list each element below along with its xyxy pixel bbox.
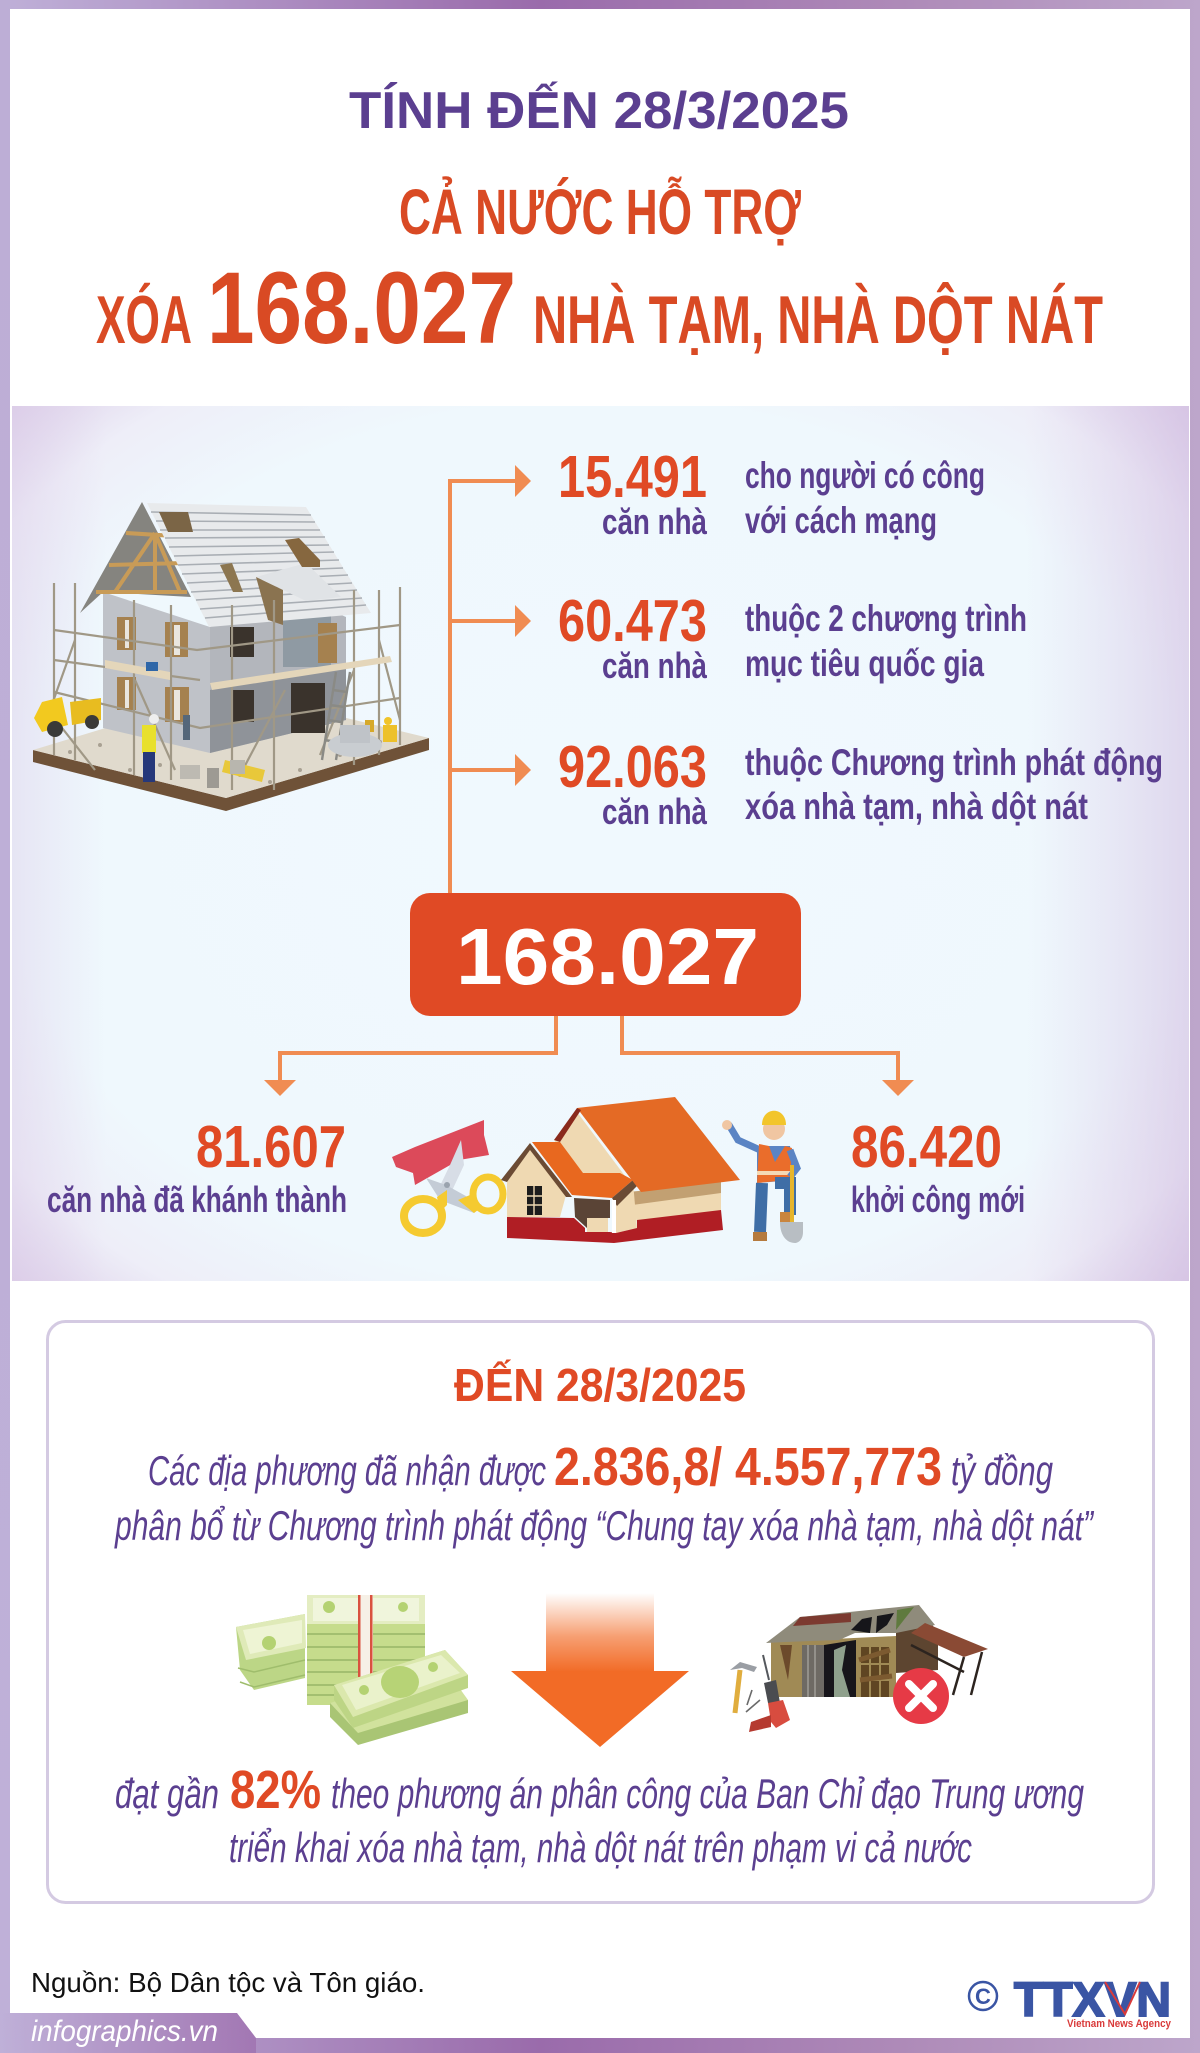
card text: result: đạt gần xyxy=(115,1770,219,1817)
outcome: inaugurated xyxy=(47,1114,347,1220)
arrow: second item xyxy=(515,605,531,637)
connector: split to two outcomes xyxy=(264,1016,914,1096)
card text: result: 82% xyxy=(230,1760,321,1820)
item: 15.491 xyxy=(558,444,985,542)
title: line three: XÓA xyxy=(96,282,192,358)
card text: received funds: 2.836,8/ 4.557,773 xyxy=(554,1437,942,1497)
title block xyxy=(96,81,1103,365)
scaffolding xyxy=(48,583,400,790)
card heading: ĐẾN 28/3/2025 xyxy=(454,1359,746,1411)
icon: finished house xyxy=(501,1097,740,1243)
item: 92.063: 92.063 xyxy=(558,734,707,800)
item: 60.473: 60.473 xyxy=(558,588,707,654)
arrow: first item xyxy=(515,465,531,497)
item: 92.063 xyxy=(558,734,1163,832)
outcome: inaugurated: 81.607 xyxy=(196,1114,346,1180)
total box: 168.027 xyxy=(456,912,759,1001)
item: 60.473: căn nhà xyxy=(602,645,708,686)
walls xyxy=(103,592,210,753)
footer tab: infographics.vn: infographics.vn xyxy=(31,2015,218,2048)
connector: vertical trunk with three arrows xyxy=(450,465,531,893)
logo: TTXVN: Vietnam News Agency xyxy=(1067,2018,1172,2030)
skylights xyxy=(159,512,193,532)
gable and truss xyxy=(80,502,191,613)
logo: TTXVN: TTXVN xyxy=(1014,1974,1171,2027)
item: 15.491: với cách mạng xyxy=(745,500,937,541)
outcome: newly started: 86.420 xyxy=(851,1114,1002,1180)
item: 15.491: 15.491 xyxy=(558,444,707,510)
card text: received funds: Các địa phương đã nhận được xyxy=(148,1447,546,1494)
icon: worker with shovel xyxy=(722,1111,803,1243)
roof xyxy=(147,503,371,627)
materials xyxy=(222,760,265,782)
outcome: newly started: khởi công mới xyxy=(851,1179,1025,1220)
illustration: house under construction xyxy=(33,502,429,811)
total box xyxy=(410,893,801,1016)
yellow truck xyxy=(34,697,68,732)
arrow: large down arrow xyxy=(511,1593,689,1747)
logo: TTXVN: C xyxy=(975,1984,991,2009)
item: 15.491: cho người có công xyxy=(745,455,985,496)
icon: dilapidated shack with red cross xyxy=(730,1605,988,1732)
windows xyxy=(117,617,337,722)
item: 60.473: mục tiêu quốc gia xyxy=(745,643,984,684)
panel: breakdown of houses xyxy=(12,406,1189,1281)
title: line three: 168.027 xyxy=(207,251,516,365)
icon: stacks of money xyxy=(236,1595,468,1745)
icon: ribbon cutting scissors xyxy=(392,1120,503,1233)
outcome: inaugurated: căn nhà đã khánh thành xyxy=(47,1179,347,1220)
panel: funding card xyxy=(48,1322,1154,1902)
item: 92.063: căn nhà xyxy=(602,791,708,832)
arrow: third item xyxy=(515,754,531,786)
source note: Nguồn: Bộ Dân tộc và Tôn giáo. xyxy=(31,1967,425,1998)
card text: received funds xyxy=(114,1437,1094,1549)
title: line two: CẢ NƯỚC HỖ TRỢ xyxy=(399,175,801,248)
item: 60.473: thuộc 2 chương trình xyxy=(745,598,1027,639)
outcome: newly started xyxy=(851,1114,1025,1220)
hammer and drill xyxy=(735,1670,740,1713)
item: 15.491: căn nhà xyxy=(602,501,708,542)
platform xyxy=(33,738,429,811)
title: date line: TÍNH ĐẾN 28/3/2025 xyxy=(349,81,849,140)
title: line three xyxy=(96,251,1103,365)
item: 92.063: xóa nhà tạm, nhà dột nát xyxy=(745,786,1088,827)
card text: result xyxy=(115,1760,1084,1871)
red cross badge xyxy=(893,1668,949,1724)
workers xyxy=(142,725,156,753)
item: 60.473 xyxy=(558,588,1027,686)
card text: received funds: tỷ đồng xyxy=(951,1447,1053,1494)
footer tab: infographics.vn xyxy=(0,2013,256,2053)
